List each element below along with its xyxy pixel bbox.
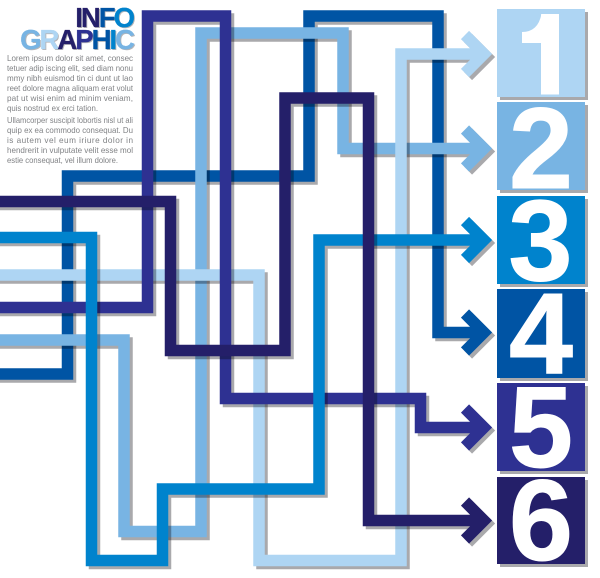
body text: Ullamcorper suscipit lobortis nisl ut ali [7, 116, 133, 125]
body text [7, 54, 134, 165]
box 4: 4 [509, 270, 573, 398]
box 2: 2 [509, 85, 573, 213]
line 1: light blue path with arrow to box 1 [0, 35, 487, 564]
body text: tetuer adip iscing elit, sed diam nonu [7, 64, 133, 73]
line 5: indigo path with arrow to box 5 [0, 16, 487, 450]
body text: hendrerit in vulputate velit esse mol [7, 146, 133, 155]
body text: estie consequat, vel illum dolore. [7, 156, 118, 165]
line 4: blue path with arrow to box 4 [0, 16, 487, 377]
body text: quis nostrud ex erci tation. [7, 104, 98, 113]
title: INFO: INFO [75, 2, 133, 33]
title: GRAPHIC: GRAPHIC [20, 24, 133, 55]
line 6: navy path with arrow to box 6 [0, 98, 487, 542]
box 5: 5 [509, 364, 573, 492]
box 3: 3 [509, 177, 572, 305]
body text: Lorem ipsum dolor sit amet, consec [7, 54, 133, 63]
body text: quip ex ea commodo consequat. Du [7, 126, 133, 135]
body text: is autem vel eum iriure dolor in [7, 136, 133, 145]
body text: reet dolore magna aliquam erat volut [7, 84, 134, 93]
body text: mmy nibh euismod tin ci dunt ut lao [7, 74, 133, 83]
line 2: mid blue path with arrow to box 2 [0, 33, 487, 534]
body text: pat ut wisi enim ad minim veniam, [7, 94, 133, 103]
line 3: bright blue path with arrow to box 3 [0, 221, 487, 564]
